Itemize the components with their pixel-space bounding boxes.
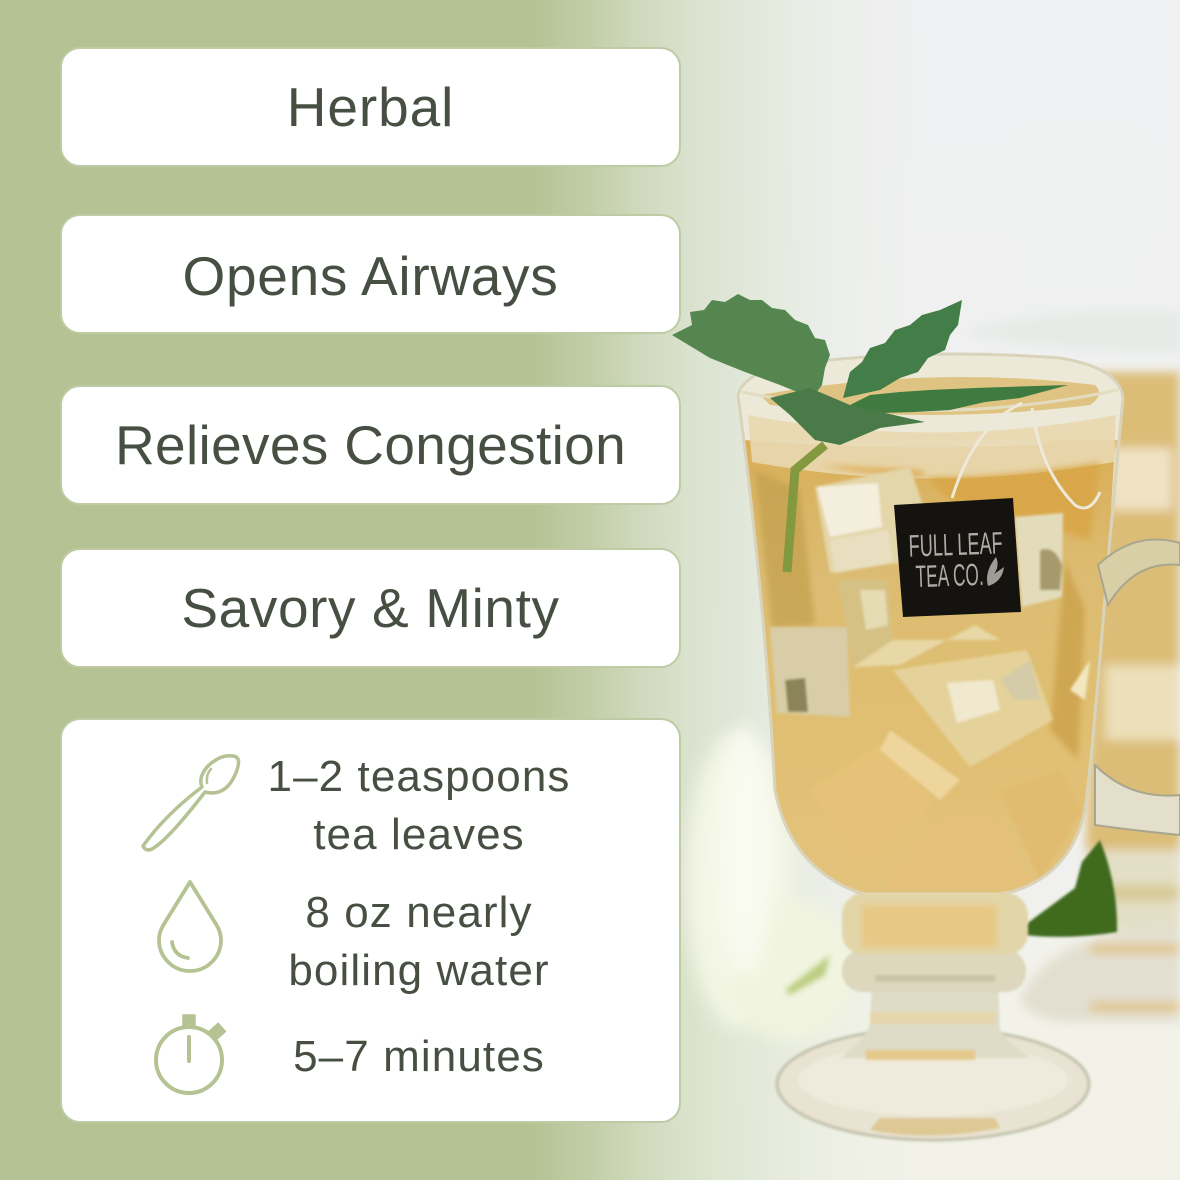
card: Relieves Congestion: [60, 385, 681, 505]
white flowers: [685, 725, 855, 1040]
text: water: boiling water: [288, 946, 550, 995]
glass outline: [738, 354, 1123, 895]
card: Savory & Minty: Savory & Minty: [181, 577, 560, 639]
card: Herbal: Herbal: [287, 76, 454, 138]
ice cubes: [770, 467, 1090, 890]
tea body: [745, 440, 1115, 893]
large left leaf: [672, 294, 830, 398]
mint sprig: [672, 294, 1068, 572]
text: teaspoons: 1–2 teaspoons: [268, 752, 570, 801]
card: Relieves Congestion: Relieves Congestion: [115, 414, 626, 476]
black tag: [894, 498, 1021, 617]
black tag: FULL LEAF: [908, 525, 1003, 564]
lower leaf: [770, 388, 925, 445]
right leaf: [843, 300, 962, 398]
card: Herbal: [60, 47, 681, 167]
card: Savory & Minty: [60, 548, 681, 668]
card: Opens Airways: [60, 214, 681, 334]
tea bag string: [952, 403, 1100, 508]
glass stem and foot: [777, 893, 1089, 1140]
glass handle: [1098, 539, 1180, 605]
text: water: [288, 888, 550, 995]
icon: spoon: [141, 754, 240, 852]
card: Opens Airways: Opens Airways: [183, 245, 558, 307]
text: water: 8 oz nearly: [305, 888, 533, 937]
back glass: [970, 310, 1180, 1022]
back mint leaf: [1025, 840, 1117, 937]
text: teaspoons: [268, 752, 570, 859]
icon: stopwatch: [154, 1014, 226, 1095]
stem: [787, 445, 825, 572]
text: teaspoons: tea leaves: [313, 810, 525, 859]
panel: brewing instructions: [60, 718, 681, 1123]
glass upper rim: [738, 354, 1123, 440]
text: minutes: 5–7 minutes: [293, 1032, 545, 1081]
long leaf: [850, 385, 1068, 413]
black tag: TEA CO.: [915, 557, 984, 594]
front glass: [738, 354, 1180, 1140]
icon: water drop: [157, 880, 223, 973]
